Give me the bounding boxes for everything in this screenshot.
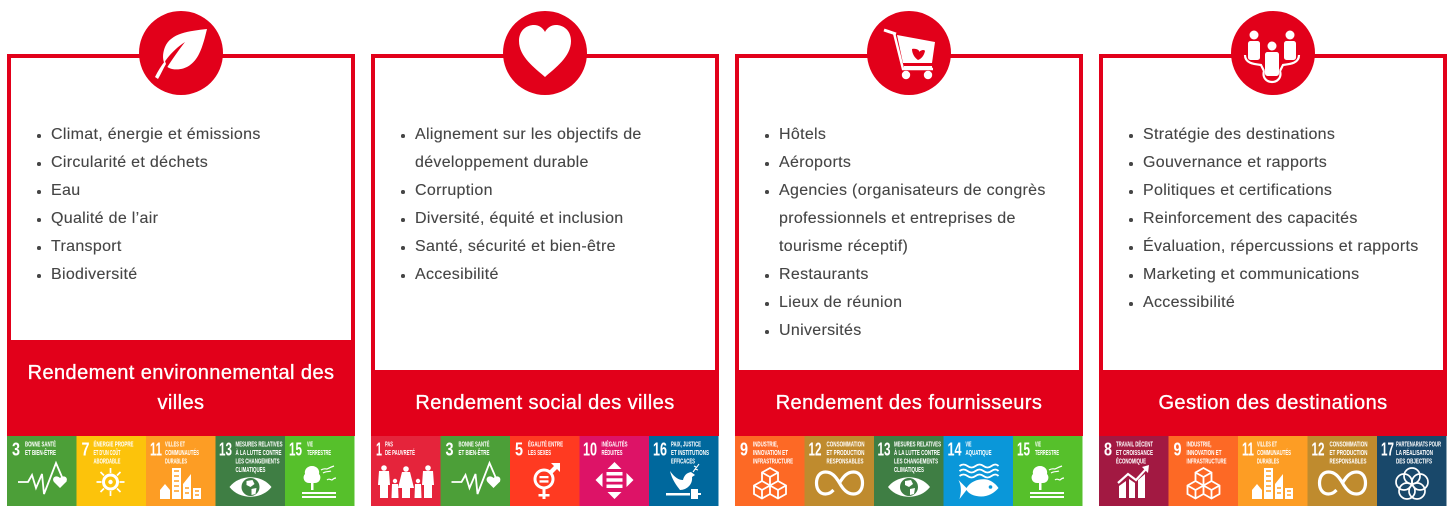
SDG 16	[649, 436, 718, 506]
SDG 7: ÉNERGIE PROPRE	[94, 440, 134, 448]
panel heading	[7, 340, 355, 436]
SDG 13	[216, 436, 285, 506]
SDG 14: 14	[948, 440, 962, 460]
SDG 13: CLIMATIQUES	[236, 465, 266, 474]
icon: leaf	[139, 11, 223, 95]
SDG 3	[7, 436, 76, 506]
SDG 12: ET PRODUCTION	[1330, 448, 1368, 457]
SDG tiles row	[7, 436, 354, 506]
SDG 10	[580, 436, 649, 506]
SDG 13: 13	[878, 440, 890, 460]
SDG 13: À LA LUTTE CONTRE	[894, 448, 940, 457]
SDG 12: 12	[1312, 440, 1324, 460]
SDG 3: 3	[12, 440, 20, 460]
bullet list: Alignement sur les objectifs de	[415, 126, 642, 143]
SDG 15: VIE	[1035, 440, 1041, 448]
SDG 5: ÉGALITÉ ENTRE	[528, 440, 563, 448]
SDG 11: 11	[1242, 440, 1254, 460]
SDG 9	[1168, 436, 1238, 506]
SDG 9: INFRASTRUCTURE	[1186, 456, 1227, 466]
bullet list: Accesibilité	[415, 266, 499, 283]
panel: environmental performance	[7, 11, 355, 506]
SDG 9	[735, 436, 804, 506]
SDG 9: 9	[740, 440, 748, 460]
bullet list: Aéroports	[779, 154, 851, 171]
panel: social performance	[371, 11, 719, 506]
SDG 5	[510, 436, 580, 506]
SDG 11	[1238, 436, 1308, 506]
panel: supplier performance	[735, 11, 1083, 506]
SDG 11: 11	[150, 440, 162, 460]
bullet list	[401, 126, 642, 283]
panel: destination management	[1099, 11, 1447, 506]
SDG 11: COMMUNAUTÉS	[1257, 448, 1291, 457]
bullet list: Hôtels	[779, 126, 826, 143]
bullet list: Agencies (organisateurs de congrès	[779, 182, 1046, 199]
bullet list: Diversité, équité et inclusion	[415, 210, 624, 227]
SDG 12: RESPONSABLES	[1330, 456, 1367, 466]
SDG tiles row	[1099, 436, 1446, 506]
SDG 14: AQUATIQUE	[966, 448, 992, 457]
panel frame	[1099, 54, 1447, 370]
SDG 3: BONNE SANTÉ	[458, 440, 490, 448]
SDG 1: 1	[376, 440, 382, 460]
SDG 12: RESPONSABLES	[826, 456, 864, 466]
bullet list: Transport	[51, 238, 122, 255]
SDG 8: ÉCONOMIQUE	[1116, 456, 1146, 466]
SDG tiles row	[735, 436, 1082, 506]
SDG 3: ET BIEN-ÊTRE	[25, 448, 56, 457]
SDG 13: LES CHANGEMENTS	[236, 456, 280, 466]
SDG 15	[1013, 436, 1082, 506]
panel frame	[7, 54, 355, 340]
SDG 10: 10	[583, 440, 597, 460]
SDG 5: 5	[515, 440, 523, 460]
SDG 12: CONSOMMATION	[1330, 440, 1368, 448]
panel heading: Gestion des destinations	[1158, 392, 1388, 414]
panel frame	[735, 54, 1083, 370]
bullet list: Politiques et certifications	[1143, 182, 1332, 199]
SDG 12	[804, 436, 874, 506]
bullet list: Stratégie des destinations	[1143, 126, 1335, 143]
icon: people group	[1231, 11, 1315, 95]
SDG 9: INFRASTRUCTURE	[753, 456, 793, 466]
SDG 15: 15	[1017, 440, 1030, 460]
bullet list: Restaurants	[779, 266, 869, 283]
SDG 3: BONNE SANTÉ	[25, 440, 56, 448]
SDG 12	[1308, 436, 1377, 506]
panel heading	[1099, 370, 1447, 436]
SDG 13: LES CHANGEMENTS	[894, 456, 938, 466]
SDG 8	[1099, 436, 1168, 506]
SDG 13: CLIMATIQUES	[894, 465, 924, 474]
SDG 15: 15	[289, 440, 302, 460]
SDG 8: TRAVAIL DÉCENT	[1116, 440, 1153, 448]
bullet list: développement durable	[415, 154, 589, 171]
panel heading	[371, 370, 719, 436]
SDG 13: 13	[219, 440, 232, 460]
SDG 5: LES SEXES	[528, 448, 551, 457]
SDG 11: VILLES ET	[165, 440, 185, 448]
SDG 14	[944, 436, 1013, 506]
SDG 7	[76, 436, 146, 506]
bullet list: professionnels et entreprises de	[779, 210, 1016, 227]
bullet list: Circularité et déchets	[51, 154, 208, 171]
SDG 7: 7	[82, 440, 90, 460]
SDG 11: DURABLES	[1257, 456, 1279, 466]
bullet list: Lieux de réunion	[779, 294, 902, 311]
SDG 1	[371, 436, 440, 506]
SDG 8: 8	[1104, 440, 1112, 460]
SDG 9: 9	[1174, 440, 1182, 460]
panel heading: villes	[158, 392, 204, 414]
SDG 1: PAS	[385, 440, 393, 448]
panel heading: Rendement des fournisseurs	[776, 392, 1042, 414]
SDG 16: 16	[653, 440, 667, 460]
SDG 15: TERRESTRE	[307, 448, 331, 457]
SDG 15: TERRESTRE	[1035, 448, 1059, 457]
SDG 10: RÉDUITES	[602, 448, 623, 457]
SDG 3	[440, 436, 510, 506]
bullet list: Gouvernance et rapports	[1143, 154, 1327, 171]
SDG 12: 12	[808, 440, 822, 460]
bullet list: Accessibilité	[1143, 294, 1235, 311]
bullet list: Biodiversité	[51, 266, 137, 283]
panel heading	[735, 370, 1083, 436]
SDG 17	[1377, 436, 1446, 506]
SDG 15: VIE	[307, 440, 313, 448]
SDG 11	[146, 436, 216, 506]
SDG 9: INDUSTRIE,	[1186, 440, 1212, 448]
panel heading: Rendement social des villes	[415, 392, 675, 414]
bullet list: Reinforcement des capacités	[1143, 210, 1358, 227]
bullet list	[37, 126, 261, 283]
SDG 9: INDUSTRIE,	[753, 440, 778, 448]
SDG 13: MESURES RELATIVES	[236, 440, 283, 448]
bullet list: Universités	[779, 322, 862, 339]
SDG 12: CONSOMMATION	[826, 440, 864, 448]
SDG 11: COMMUNAUTÉS	[165, 448, 199, 457]
panel heading: Rendement environnemental des	[28, 362, 334, 384]
SDG 14: VIE	[966, 440, 972, 448]
SDG 13: À LA LUTTE CONTRE	[236, 448, 282, 457]
SDG 11: DURABLES	[165, 456, 187, 466]
SDG 8: ET CROISSANCE	[1116, 448, 1153, 457]
SDG 7: ET D’UN COÛT	[94, 448, 121, 457]
SDG 9: INNOVATION ET	[753, 448, 788, 457]
panel frame	[371, 54, 719, 370]
SDG 13	[874, 436, 944, 506]
SDG 10: INÉGALITÉS	[602, 440, 628, 448]
SDG 3: 3	[446, 440, 454, 460]
SDG 1: DE PAUVRETÉ	[385, 448, 415, 457]
SDG 9: INNOVATION ET	[1186, 448, 1222, 457]
SDG 11: VILLES ET	[1257, 440, 1277, 448]
bullet list: tourisme réceptif)	[779, 238, 908, 255]
bullet list: Corruption	[415, 182, 493, 199]
SDG 7: ABORDABLE	[94, 456, 121, 466]
bullet list: Évaluation, répercussions et rapports	[1143, 238, 1419, 255]
icon: heart	[503, 11, 587, 95]
bullet list	[765, 126, 1046, 339]
SDG 3: ET BIEN-ÊTRE	[458, 448, 490, 457]
bullet list: Santé, sécurité et bien-être	[415, 238, 616, 255]
bullet list: Marketing et communications	[1143, 266, 1359, 283]
SDG tiles row	[371, 436, 718, 506]
bullet list	[1129, 126, 1419, 311]
SDG 17: 17	[1381, 440, 1394, 460]
SDG 13: MESURES RELATIVES	[894, 440, 941, 448]
SDG 16: EFFICACES	[671, 456, 695, 466]
SDG 15	[285, 436, 354, 506]
bullet list: Qualité de l’air	[51, 210, 158, 227]
icon: shopping cart	[867, 11, 951, 95]
SDG 12: ET PRODUCTION	[826, 448, 864, 457]
bullet list: Eau	[51, 182, 80, 199]
bullet list: Climat, énergie et émissions	[51, 126, 261, 143]
